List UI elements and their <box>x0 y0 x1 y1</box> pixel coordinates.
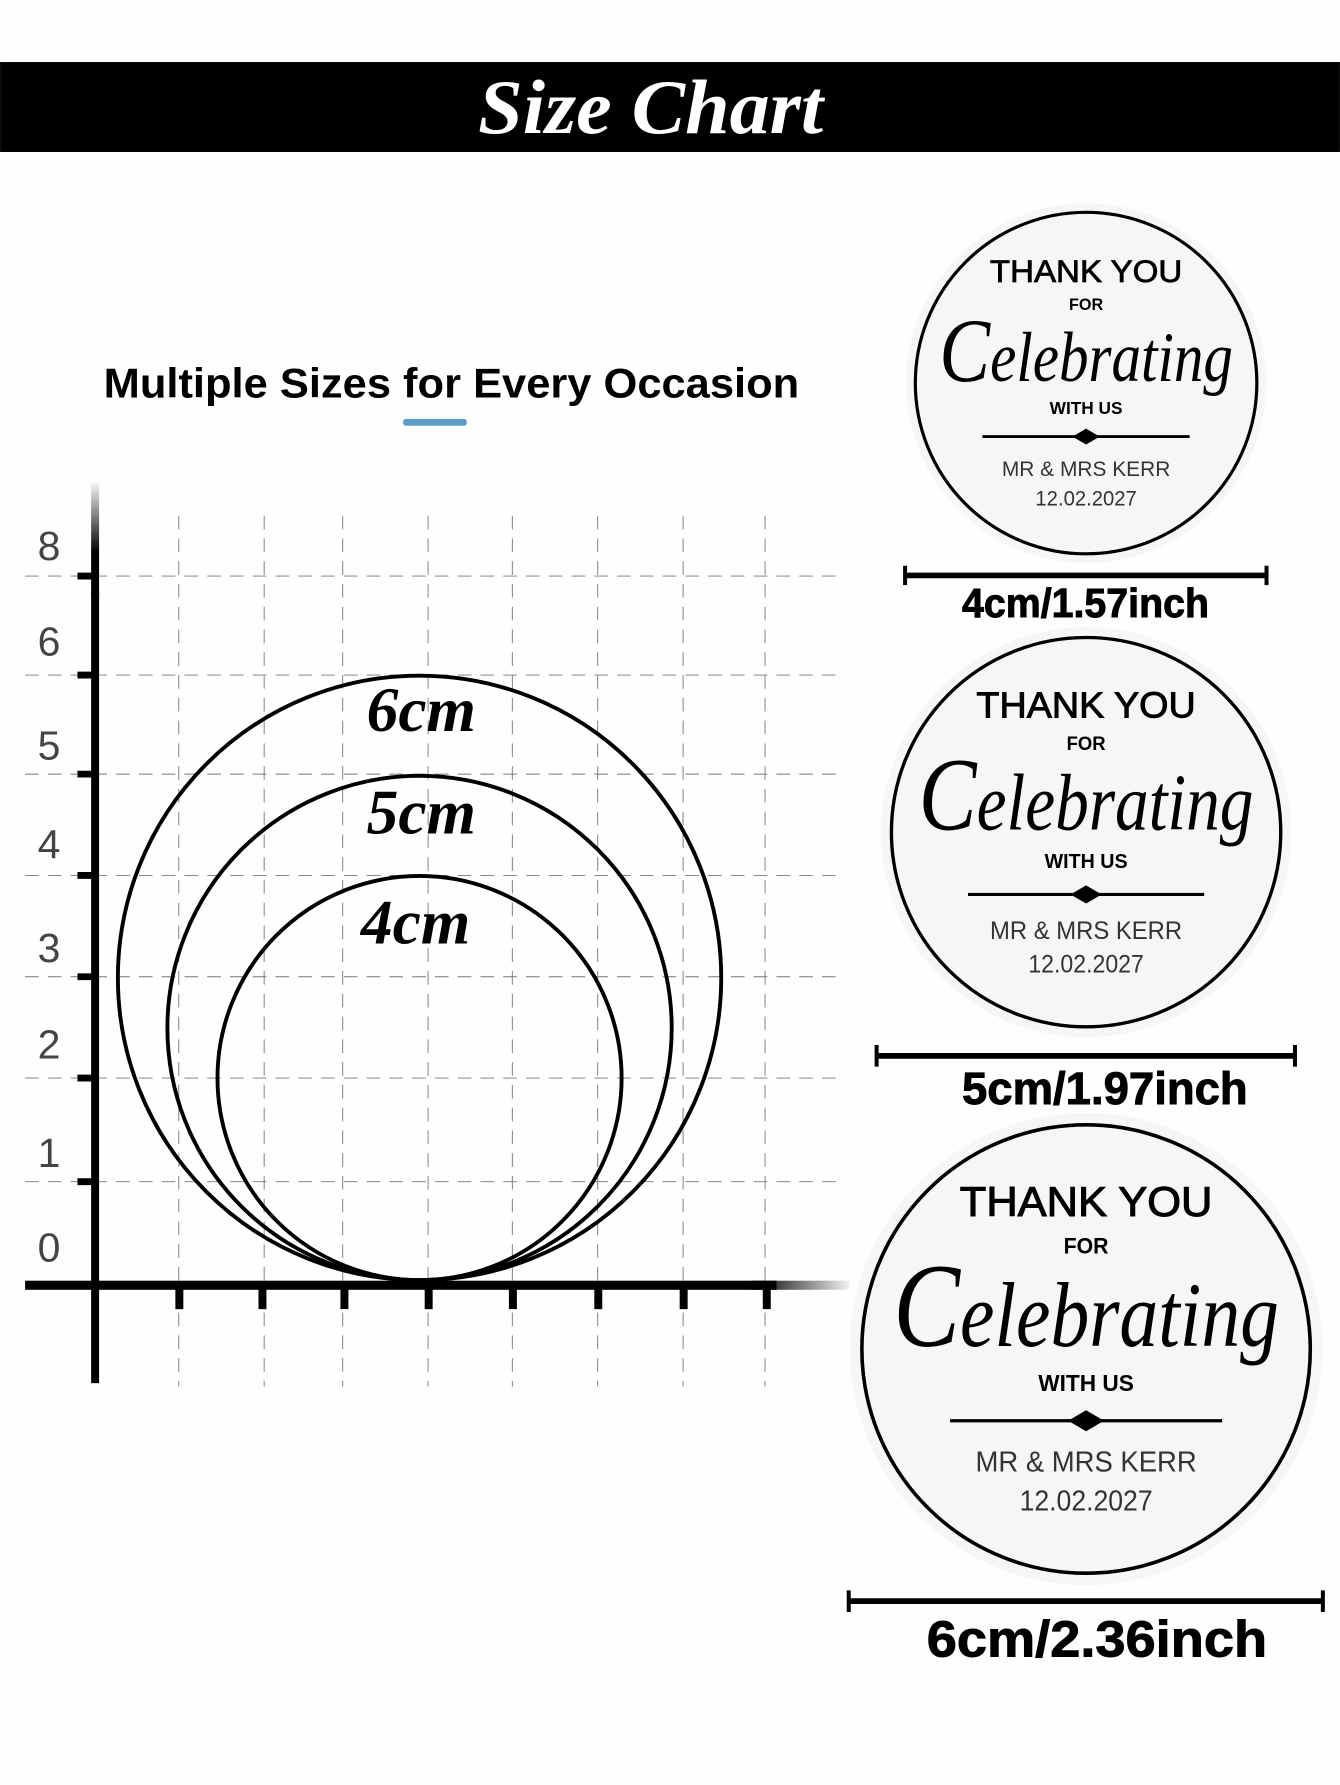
sticker: 6cm: Celebrating <box>893 1239 1279 1372</box>
size comparison chart <box>25 484 849 1387</box>
sticker: 6cm: FOR <box>1064 1233 1109 1258</box>
y axis numbers: 8 <box>38 523 60 569</box>
sticker: 4cm: FOR <box>1069 295 1103 314</box>
sticker: 5cm: FOR <box>1067 733 1106 755</box>
title: Size Chart <box>478 64 826 150</box>
sticker: 6cm: 12.02.2027 <box>1020 1485 1153 1517</box>
sticker: 4cm: WITH US <box>1050 398 1123 418</box>
sticker: 4cm: MR & MRS KERR <box>1002 456 1170 481</box>
dimension: 5cm <box>877 1045 1296 1114</box>
y axis <box>77 484 99 1383</box>
y axis numbers: 4 <box>38 821 60 867</box>
grid lines <box>25 516 840 1387</box>
sticker: 6cm: WITH US <box>1038 1370 1134 1396</box>
x axis <box>25 1281 849 1309</box>
sticker: 5cm: WITH US <box>1045 851 1128 873</box>
y axis numbers: 5 <box>38 722 60 768</box>
sticker: 5cm: MR & MRS KERR <box>990 918 1182 945</box>
heading: multiple sizes: Multiple Sizes for Every Occasion <box>104 359 799 406</box>
sticker: 5cm: Celebrating <box>919 738 1253 853</box>
circle outlines and labels: 4cm <box>360 887 470 958</box>
circle outlines and labels <box>118 674 721 1280</box>
circle outlines and labels: 5cm <box>367 776 476 847</box>
sticker: 4cm <box>906 203 1266 563</box>
dimension: 6cm: 6cm/2.36inch <box>927 1610 1267 1667</box>
sticker: 6cm: MR & MRS KERR <box>975 1447 1197 1479</box>
sticker: 5cm: THANK YOU <box>976 684 1196 725</box>
dimension: 4cm: 4cm/1.57inch <box>962 580 1209 626</box>
dimension: 4cm <box>905 566 1267 626</box>
sticker: 6cm: THANK YOU <box>960 1178 1212 1225</box>
sticker: 5cm: 12.02.2027 <box>1028 951 1144 978</box>
y axis numbers: 3 <box>38 925 60 971</box>
sticker: 4cm: 12.02.2027 <box>1035 485 1137 510</box>
sticker: 4cm: THANK YOU <box>990 253 1182 289</box>
y axis numbers: 6 <box>38 619 60 665</box>
dimension: 5cm: 5cm/1.97inch <box>962 1063 1248 1114</box>
y axis numbers <box>38 523 60 1270</box>
circle outlines and labels: 6cm <box>367 674 476 745</box>
sticker: 5cm <box>881 627 1291 1037</box>
y axis numbers: 2 <box>38 1022 60 1068</box>
sticker: 6cm <box>850 1113 1322 1585</box>
heading: multiple sizes <box>104 359 799 426</box>
heading accent bar <box>403 419 467 426</box>
dimension: 6cm <box>848 1590 1324 1667</box>
y axis numbers: 1 <box>38 1130 60 1176</box>
header band <box>0 62 1340 152</box>
sticker: 4cm: Celebrating <box>939 300 1233 401</box>
y axis numbers: 0 <box>38 1224 60 1270</box>
